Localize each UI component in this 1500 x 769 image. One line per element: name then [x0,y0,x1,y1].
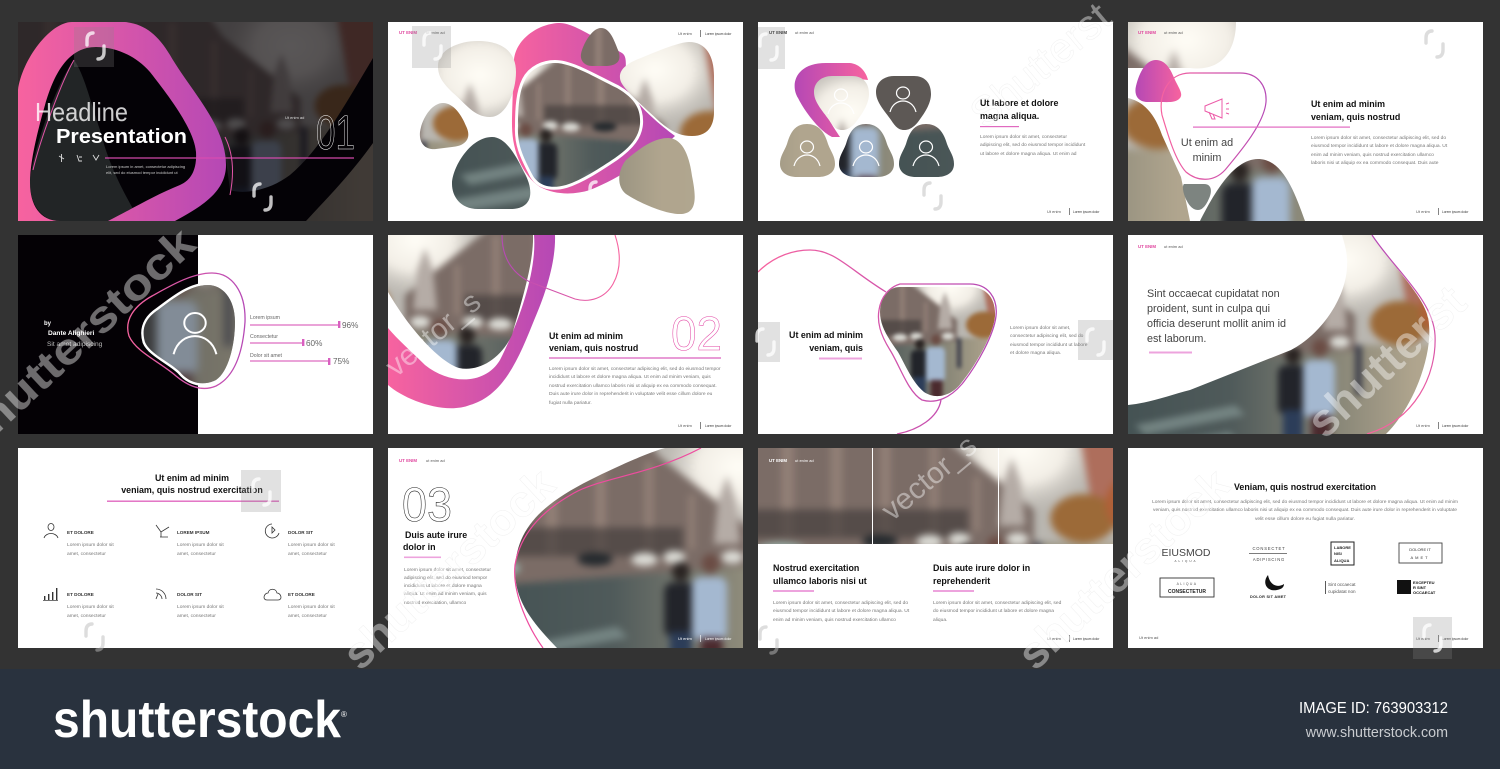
logo 3: ALIQUA [1334,558,1349,563]
column 1: Lorem ipsum dolor sit amet, consectetur adipiscing elit, sed do [773,600,908,606]
header [1138,30,1183,35]
body text: Lorem ipsum dolor sit amet, consectetur adipiscing elit, sed do eiusmod tempor incididunt ut labore et dolore magna aliqua. Ut enim ad minim [1152,499,1458,505]
footer tag: Lorem ipsum dolor [1442,637,1469,641]
header: ut enim ad [1164,244,1183,249]
divider line [107,500,279,502]
column 1: eiusmod tempor incididunt ut labore et dolore magna aliqua. Ut [773,608,910,614]
column 1 [773,563,910,623]
logo 7: cupidatat non [1328,589,1356,594]
body text: eiusmod tempor incididunt ut labore et dolore magna aliqua. Ut [1311,143,1448,149]
panel: slide 10 section 03 [320,313,903,709]
blob person 2 [876,76,931,130]
panel: slide 2 photo blobs [388,22,743,221]
heading [789,330,863,353]
item 2: LOREM IPSUM [177,530,210,535]
body text [1010,325,1088,356]
item 1: ET DOLORE [67,530,94,535]
blob person 1 [814,76,869,130]
body text [1311,135,1448,166]
accent line [819,358,862,360]
logo 2: CONSECTET [1252,546,1286,551]
accent line [1149,352,1192,354]
footer tag: Ut enim [1416,209,1430,214]
shape: black swoosh [170,58,373,221]
footer tag [678,422,732,429]
panel: slide 12 logos [1128,448,1483,648]
bar 96%: 96% [342,321,358,330]
footer tag: Ut enim [678,31,692,36]
column 2: Duis aute irure dolor in [933,563,1030,573]
bar 60%: 60% [306,339,322,348]
logo 8 [1397,580,1436,595]
photo [265,100,795,460]
column 2: reprehenderit [933,576,990,586]
heading: veniam, quis [809,343,863,353]
heading [549,331,638,353]
footer tag: Lorem ipsum dolor [705,32,732,36]
number: 03 [402,479,452,532]
blob person 4 [839,124,894,177]
label: Ut enim ad [285,115,304,120]
item 6: Lorem ipsum dolor sit [288,604,335,610]
logo 6: DOLOR SIT AMET [1250,595,1287,599]
item 6: ET DOLORE [288,592,315,597]
header: UT ENIM [1138,30,1156,35]
photo blob C [620,42,714,136]
footer tag [678,30,732,37]
heading: Duis aute irure [405,530,467,540]
footer tag: Ut enim [1047,636,1061,641]
panel: slide 6 section 02 [265,100,795,460]
item 1: Lorem ipsum dolor sit [67,542,114,548]
photo: small blob [1182,184,1211,210]
shape: pink band [388,235,555,408]
header [769,458,814,463]
photo blob B [580,28,620,66]
body text: ut labore et dolore magna aliqua. Ut enim ad [980,151,1077,157]
panel: slide 3 people [758,22,1113,221]
accent line [404,556,441,558]
watermarks: vector_s [875,429,983,527]
bar 75%: 75% [333,357,349,366]
shape: pink ring [18,22,226,221]
heading: dolor in [403,542,436,552]
icon: person [174,313,216,354]
footer tag: Lorem ipsum dolor [705,637,732,641]
item 3 [265,524,335,557]
body text: nostrud exercitation, ullamco [404,600,467,606]
ring line [515,448,701,648]
progress bars [250,315,358,366]
heading [1311,99,1400,122]
shape: pink hook [795,63,868,137]
logo 5: ALIQUA [1177,582,1197,586]
body text [404,567,491,606]
panel: slide 9 icon grid [18,448,373,648]
heading: magna aliqua. [980,111,1039,121]
photo [320,313,903,709]
header: ut enim ad [426,458,445,463]
ring [502,235,619,300]
item 1 [44,524,114,557]
body text: Lorem ipsum dolor sit amet, consectetur [404,567,491,573]
thin ring lines [33,60,233,195]
blob person 3 [780,124,835,177]
item 3: DOLOR SIT [288,530,313,535]
column 1: enim ad minim veniam, quis nostrud exercitation ullamco [773,617,896,623]
heading [980,98,1058,121]
number: 02 [671,308,722,361]
title [36,102,186,143]
bar 60% [250,334,322,348]
body text: velit esse cillum dolore eu fugiat nulla pariatur. [1255,516,1355,522]
bar 75%: Dolor sit amet [250,353,283,359]
photo blob E [452,137,530,209]
title: Presentation [56,125,187,148]
photo: left column [1128,98,1190,221]
footer tag [1047,635,1100,642]
photo [0,0,406,457]
bar 75% [250,353,349,366]
photo dividers [872,448,999,544]
header [1138,244,1183,249]
photo blob A [438,41,516,117]
item 3: amet, consectetur [288,551,327,557]
column 2: aliqua. [933,617,947,623]
heading: Ut enim ad minim [549,331,623,341]
body text: Duis aute irure dolor in reprehenderit in voluptate velit esse cillum dolore eu [549,391,713,397]
body text [1152,499,1458,522]
heading: Ut labore et dolore [980,98,1058,108]
logo 4 [1399,543,1442,563]
author text: Sit amet adipiscing [47,341,103,348]
logo 8: OCCAECAT [1413,590,1436,595]
logo 6 [1250,575,1287,599]
logo 2 [1249,546,1287,562]
shape: pink behind [512,23,675,193]
body text: nostrud exercitation ullamco laboris nisi ut aliquip ex ea commodo consequat. [549,383,717,389]
logo 1: ALIQUA [1174,559,1198,563]
ring line [1367,235,1435,434]
footer tag: Ut enim [1416,423,1430,428]
footer tag [678,635,732,642]
watermark tiles [74,26,1452,659]
shape: black hole [30,47,196,221]
logo 1: EIUSMOD [1161,547,1211,559]
body text: adipiscing elit, sed do eiusmod tempor [404,575,488,581]
logo 7 [1325,581,1356,594]
footer tag: Ut enim [678,423,692,428]
logo: shutterstock: ® [341,710,347,719]
item 4: amet, consectetur [67,613,106,619]
panel: slide 7 triangle [723,203,1113,434]
heading: Ut enim ad minim [1311,99,1385,109]
shape: pink blob [1135,60,1181,102]
logo 8: R SINT [1413,585,1427,590]
logo 4: DOLORE IT [1409,547,1431,552]
ring [758,250,996,434]
footer tag: Lorem ipsum dolor [705,424,732,428]
icons: social [59,154,99,162]
quote: officia deserunt mollit anim id [1147,318,1286,330]
logo 3 [1331,542,1354,565]
item 4: Lorem ipsum dolor sit [67,604,114,610]
quote: Sint occaecat cupidatat non [1147,288,1280,300]
watermarks: shutterst [1296,275,1476,447]
watermarks: shutterstock [1008,459,1240,679]
heading: Ut enim ad minim [789,330,863,340]
item 6: amet, consectetur [288,613,327,619]
bar 60%: Consectetur [250,334,278,340]
logo 5: CONSECTETUR [1168,589,1206,595]
item 5: Lorem ipsum dolor sit [177,604,224,610]
text: ring label: minim [1193,152,1221,164]
footer bar [0,669,1500,769]
header: ut enim ad [795,458,814,463]
item 4: ET DOLORE [67,592,94,597]
body text: incididunt ut labore et dolore magna [404,583,482,589]
item 2: amet, consectetur [177,551,216,557]
photo [965,120,1495,480]
header [399,458,445,463]
header [399,31,444,34]
header [769,30,814,35]
header: ut enim ad [795,30,814,35]
column 2: do eiusmod tempor incididunt ut labore et dolore magna [933,608,1054,614]
item 6 [264,589,335,619]
panel: slide 8 quote [965,120,1495,480]
column 2 [933,563,1062,623]
heading: veniam, quis nostrud [1311,112,1400,122]
item 4 [43,588,114,619]
header: UT ENIM [769,30,787,35]
item 5: DOLOR SIT [177,592,202,597]
bar 96% [250,315,358,330]
ring [128,273,245,388]
title: Headline [35,97,128,127]
blob person 5 [899,124,954,177]
number: 01 [316,107,355,160]
logo 5 [1160,578,1214,597]
footer tag [1416,635,1469,642]
panel: slide 1 cover [18,22,373,221]
subtitle: Lorem ipsum in amet, consectetur adipiscing [106,164,185,169]
author text: by [44,321,52,327]
photo blob F [619,138,695,214]
photo: bottom blob [1200,159,1305,221]
footer tag: Ut enim [1416,636,1430,641]
text: ring label: Ut enim ad [1181,137,1233,149]
body text: veniam, quis nostrud exercitation ullamco laboris nisi ut aliquip ex ea commodo consequat. Duis aute irure dolor in reprehenderit in voluptate [1153,507,1457,513]
quote: est laborum. [1147,333,1206,345]
column 1: Nostrud exercitation [773,563,859,573]
quote [1147,288,1286,345]
item 3: Lorem ipsum dolor sit [288,542,335,548]
accent line [980,126,1019,127]
logo: shutterstock: shutterstock [53,691,341,749]
photo blob D [420,103,468,150]
heading: Ut enim ad minim [155,473,229,483]
header: ut enim ad [1164,30,1183,35]
quote: proident, sunt in culpa qui [1147,303,1270,315]
item 5: amet, consectetur [177,613,216,619]
heading [403,530,467,552]
heading [121,473,263,495]
header: UT ENIM [399,30,417,35]
body text: Lorem ipsum dolor sit amet, consectetur adipiscing elit, sed do [1311,135,1446,141]
watermarks: shutterstock [333,459,565,679]
body text: fugiat nulla pariatur. [549,400,592,406]
header: UT ENIM [399,458,417,463]
body text: eiusmod tempor incididunt ut labore [1010,342,1088,348]
body text: aliqua. Ut enim ad minim veniam, quis [404,591,487,597]
photo [723,203,1041,419]
panel: slide 5 author [0,0,406,457]
footer tag [1416,422,1469,429]
footer tag: Lorem ipsum dolor [1073,637,1100,641]
body text: laboris nisi ut aliquip ex ea commodo consequat. Duis aute [1311,160,1439,166]
logo 3: NISI [1334,551,1342,556]
column 1: ullamco laboris nisi ut [773,576,867,586]
icon: megaphone [1205,99,1229,119]
heading: Veniam, quis nostrud exercitation [1234,482,1376,492]
divider line [105,157,354,159]
footer tag: Lorem ipsum dolor [1442,424,1469,428]
item 2 [156,525,224,557]
photo strip [758,448,1113,544]
panel: slide 4 megaphone [1128,22,1483,221]
logo 2: ADIPISCING [1253,557,1285,562]
item 5 [156,589,224,619]
footer tag: Ut enim [1047,209,1061,214]
author text: Dante Alighieri [48,330,94,337]
body text: et dolore magna aliqua. [1010,350,1061,356]
subtitle [106,166,185,175]
image id: IMAGE ID: 763903312 [1299,700,1448,717]
divider line [1193,126,1350,128]
photo: top blob [1128,22,1236,68]
body text: incididunt ut labore et dolore magna aliqua. Ut enim ad minim veniam, quis [549,374,711,380]
ring [1161,73,1266,179]
column 2: Lorem ipsum dolor sit amet, consectetur adipiscing elit, sed [933,600,1062,606]
photo: darkened street [18,22,373,221]
panel: slide 11 two columns [605,295,1188,691]
left tag: Ut enim ad [1139,635,1158,640]
body text: Lorem ipsum dolor sit amet, consectetur adipiscing elit, sed do eiusmod tempor [549,366,721,372]
author text [44,321,103,348]
footer tag: Lorem ipsum dolor [1442,210,1469,214]
body text: Lorem ipsum dolor sit amet, [1010,325,1070,331]
header: ut enim ad [426,30,445,35]
url: www.shutterstock.com [1305,725,1448,741]
watermarks: vector_s [379,285,487,383]
body text [980,134,1086,157]
text: ring label [1182,138,1232,161]
footer tag [1416,208,1469,215]
body text [549,366,721,406]
footer tag: Ut enim [678,636,692,641]
divider line [549,357,721,359]
body text: enim ad minim veniam, quis nostrud exercitation ullamco [1311,152,1434,158]
footer tag: Lorem ipsum dolor [1073,210,1100,214]
logo 8: EXCEPTEU [1413,580,1435,585]
subtitle: elit, sed do eiusmod tempor incididunt ut [106,170,178,175]
item 1: amet, consectetur [67,551,106,557]
body text: Lorem ipsum dolor sit amet, consectetur [980,134,1067,140]
body text: consectetur adipiscing elit, sed do [1010,333,1084,339]
black half [18,235,198,434]
heading: veniam, quis nostrud [549,343,638,353]
item 2: Lorem ipsum dolor sit [177,542,224,548]
heading: veniam, quis nostrud exercitation [121,485,263,495]
header: UT ENIM [769,458,787,463]
body text: adipiscing elit, sed do eiusmod tempor incididunt [980,142,1086,148]
logo 7: Sint occaecat [1328,582,1356,587]
logo 4: AMET [1410,555,1430,560]
footer tag [1047,208,1100,215]
header: UT ENIM [1138,244,1156,249]
white halo [144,285,235,383]
bar 96%: Lorem ipsum [250,315,280,321]
shape: dark inner hole photo [30,60,140,221]
photo: centre with white border [518,63,640,187]
logo 3: LABORE [1334,545,1351,550]
